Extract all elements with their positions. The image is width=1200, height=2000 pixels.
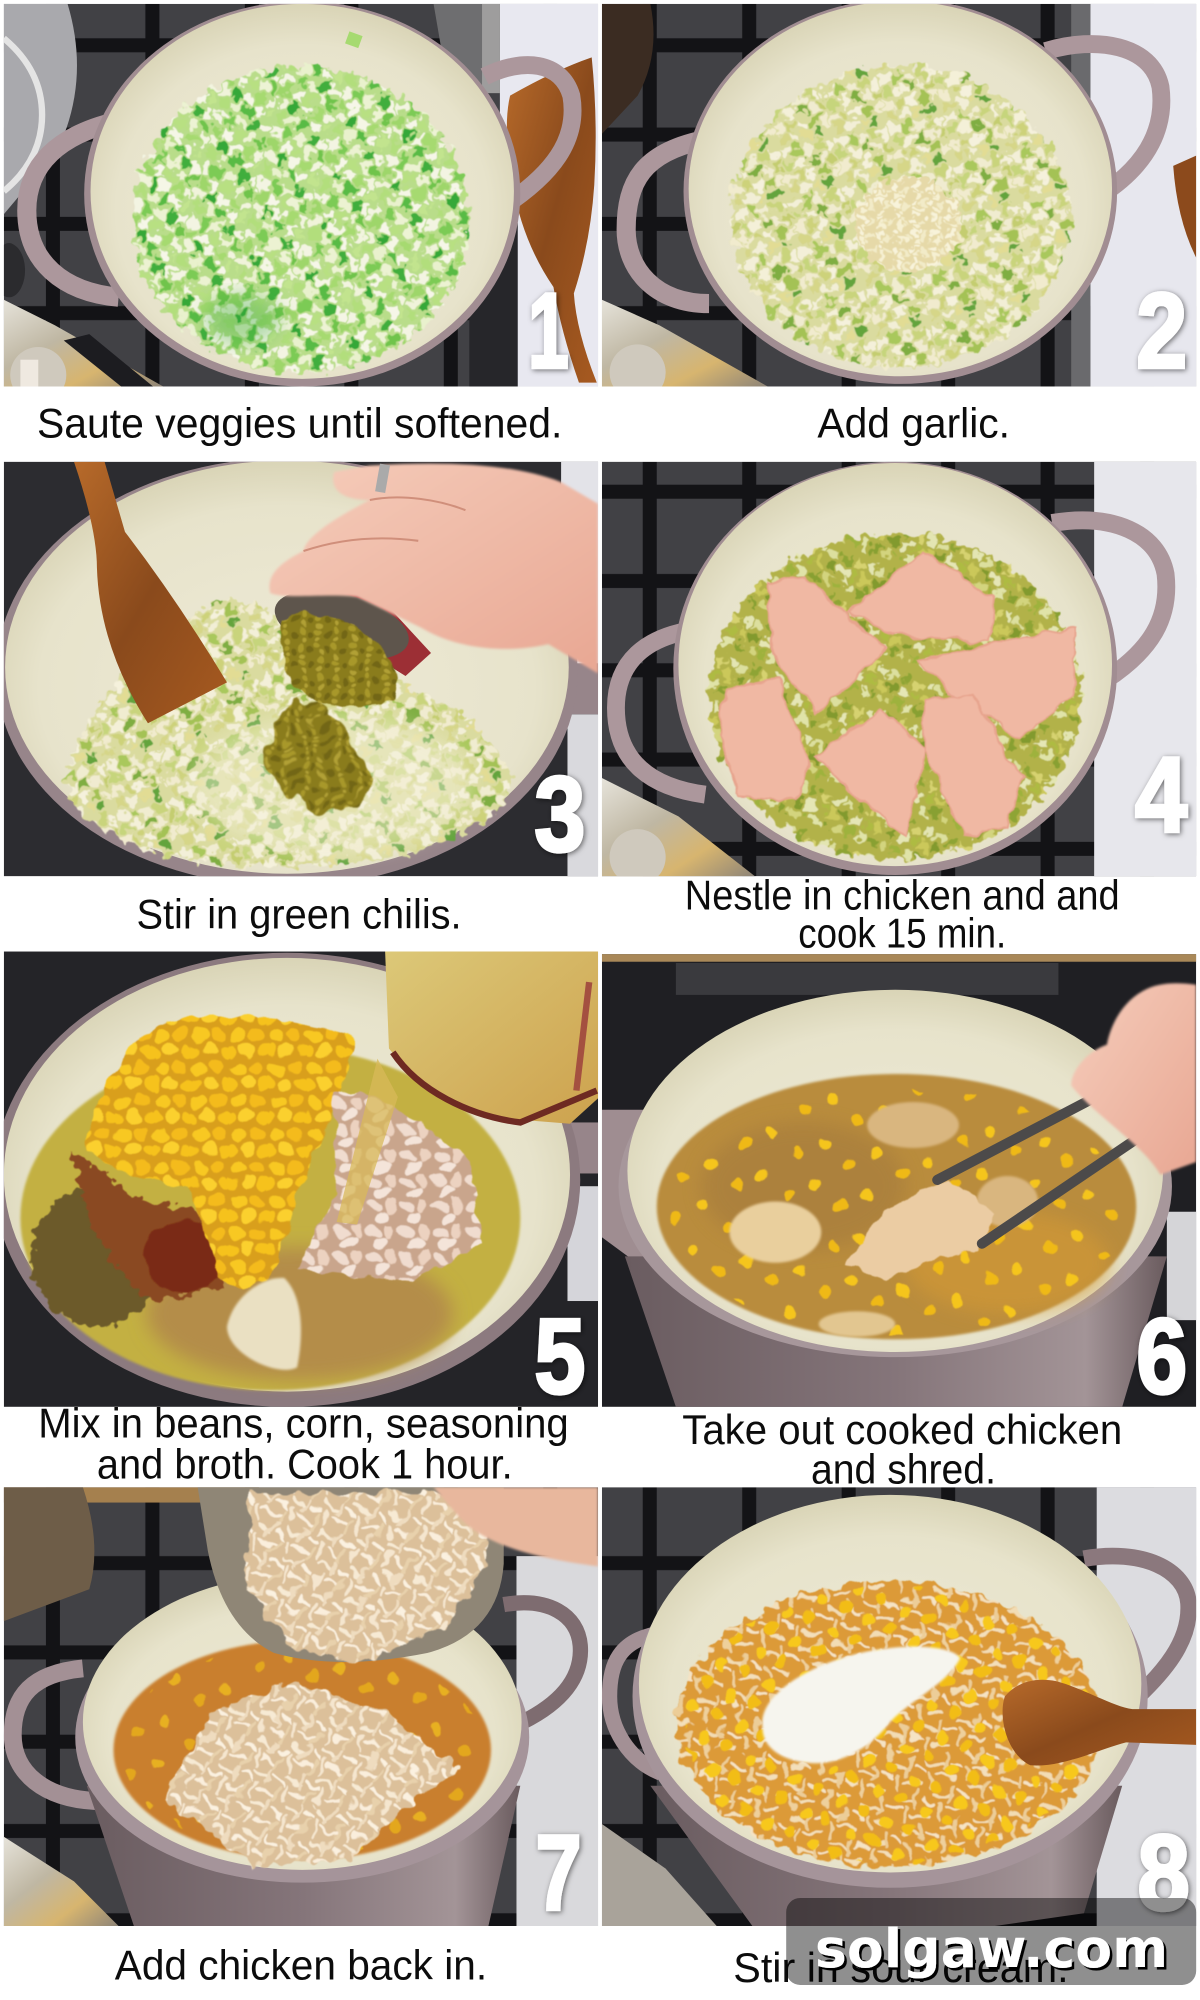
hand [269,464,598,673]
icon: wooden spoon [74,462,227,723]
soup base [709,533,1081,860]
step number 6: 6 [1136,1296,1187,1416]
panel: step 2 [602,0,1196,401]
icon: right pot handle [485,65,573,208]
beans [297,1091,482,1282]
panel: step 4 [602,462,1196,885]
caption: step 4: Nestle in chicken and and [685,871,1120,918]
veggies [731,66,1070,367]
corn [87,1016,355,1287]
step number 7: 7 [536,1812,582,1932]
photo: chicken nestled in pot [602,462,1196,876]
photo: pot with veggies and garlic [602,4,1196,386]
measuring cup [283,589,431,676]
panel: step 8 [602,1487,1196,1926]
caption: step 6 [682,1406,1122,1492]
sour cream [762,1647,960,1763]
caption: step 8: Stir in sour cream. [733,1944,1069,1991]
chicken pieces [729,1102,1038,1337]
tongs [937,1093,1148,1244]
chicken [227,1278,301,1370]
icon: left pot handle [27,121,119,297]
panel: step 3 [0,458,598,886]
shredded chicken in bowl [246,1492,488,1662]
step number 1: 1 [528,270,569,390]
photo: adding shredded chicken back in [4,1487,598,1926]
pouring cup [385,952,598,1124]
bowl [198,1487,504,1662]
icon: left pot handle [13,1668,96,1801]
pot body [650,1786,1122,1926]
soup [113,1640,491,1860]
step number 3: 3 [534,754,585,874]
icon: right pot handle [1046,44,1161,195]
caption: step 5 [38,1399,569,1487]
caption: step 5: Mix in beans, corn, seasoning [38,1399,569,1447]
caption: step 1: Saute veggies until softened. [37,399,562,447]
chili paste pour [281,613,397,705]
pot body [87,1786,520,1926]
icon: right pot handle [1084,1556,1189,1703]
broth stream [337,1059,398,1224]
caption: step 6: and shred. [811,1445,996,1492]
icon: wooden spoon [507,57,597,383]
step number 2: 2 [1136,270,1187,390]
veggies [66,600,511,866]
panel: step 7 [4,1487,598,1926]
step number 8: 8 [1138,1812,1190,1932]
icon: left pot handle [616,629,705,795]
chicken pieces [718,551,1075,835]
lifted chicken [845,1180,992,1282]
pot body [625,1256,1167,1407]
caption: step 2: Add garlic. [817,399,1010,447]
hand [434,1487,598,1566]
photo: pot of sauteed green veggies [4,4,598,386]
step number 5: 5 [534,1296,585,1416]
panel: step 5 [0,952,598,1407]
photo: adding beans, corn, seasoning and broth [4,952,598,1407]
caption: step 4: cook 15 min. [798,910,1006,957]
icon: right pot handle [504,1603,580,1722]
garlic [854,177,962,272]
soup [657,1074,1136,1339]
caption: step 6: Take out cooked chicken [682,1406,1122,1453]
watermark: solgaw.com [815,1918,1168,1980]
photo: taking out the cooked chicken with tongs [602,954,1196,1407]
caption: step 3: Stir in green chilis. [136,891,462,938]
photo: stirring in sour cream [602,1487,1196,1926]
photo: stirring in green chilis [4,462,598,876]
caption: step 7: Add chicken back in. [115,1942,487,1989]
broth base [20,1046,520,1390]
veggies [133,66,469,372]
shredded chicken [163,1681,460,1866]
caption: step 4 [685,871,1120,957]
panel: step 1 [4,1,598,403]
icon: left pot handle [610,1633,663,1773]
step number 4: 4 [1135,735,1187,855]
soup with shredded chicken [677,1582,1101,1867]
chili paste pile [261,695,371,813]
caption: step 5: and broth. Cook 1 hour. [97,1440,513,1487]
hand [1071,983,1196,1175]
icon: left pot handle [626,140,709,304]
spices [32,1185,159,1328]
panel: step 6 [602,954,1196,1407]
watermark [786,1898,1196,1985]
icon: wooden spoon [1003,1680,1196,1766]
icon: right pot handle [1052,520,1166,680]
